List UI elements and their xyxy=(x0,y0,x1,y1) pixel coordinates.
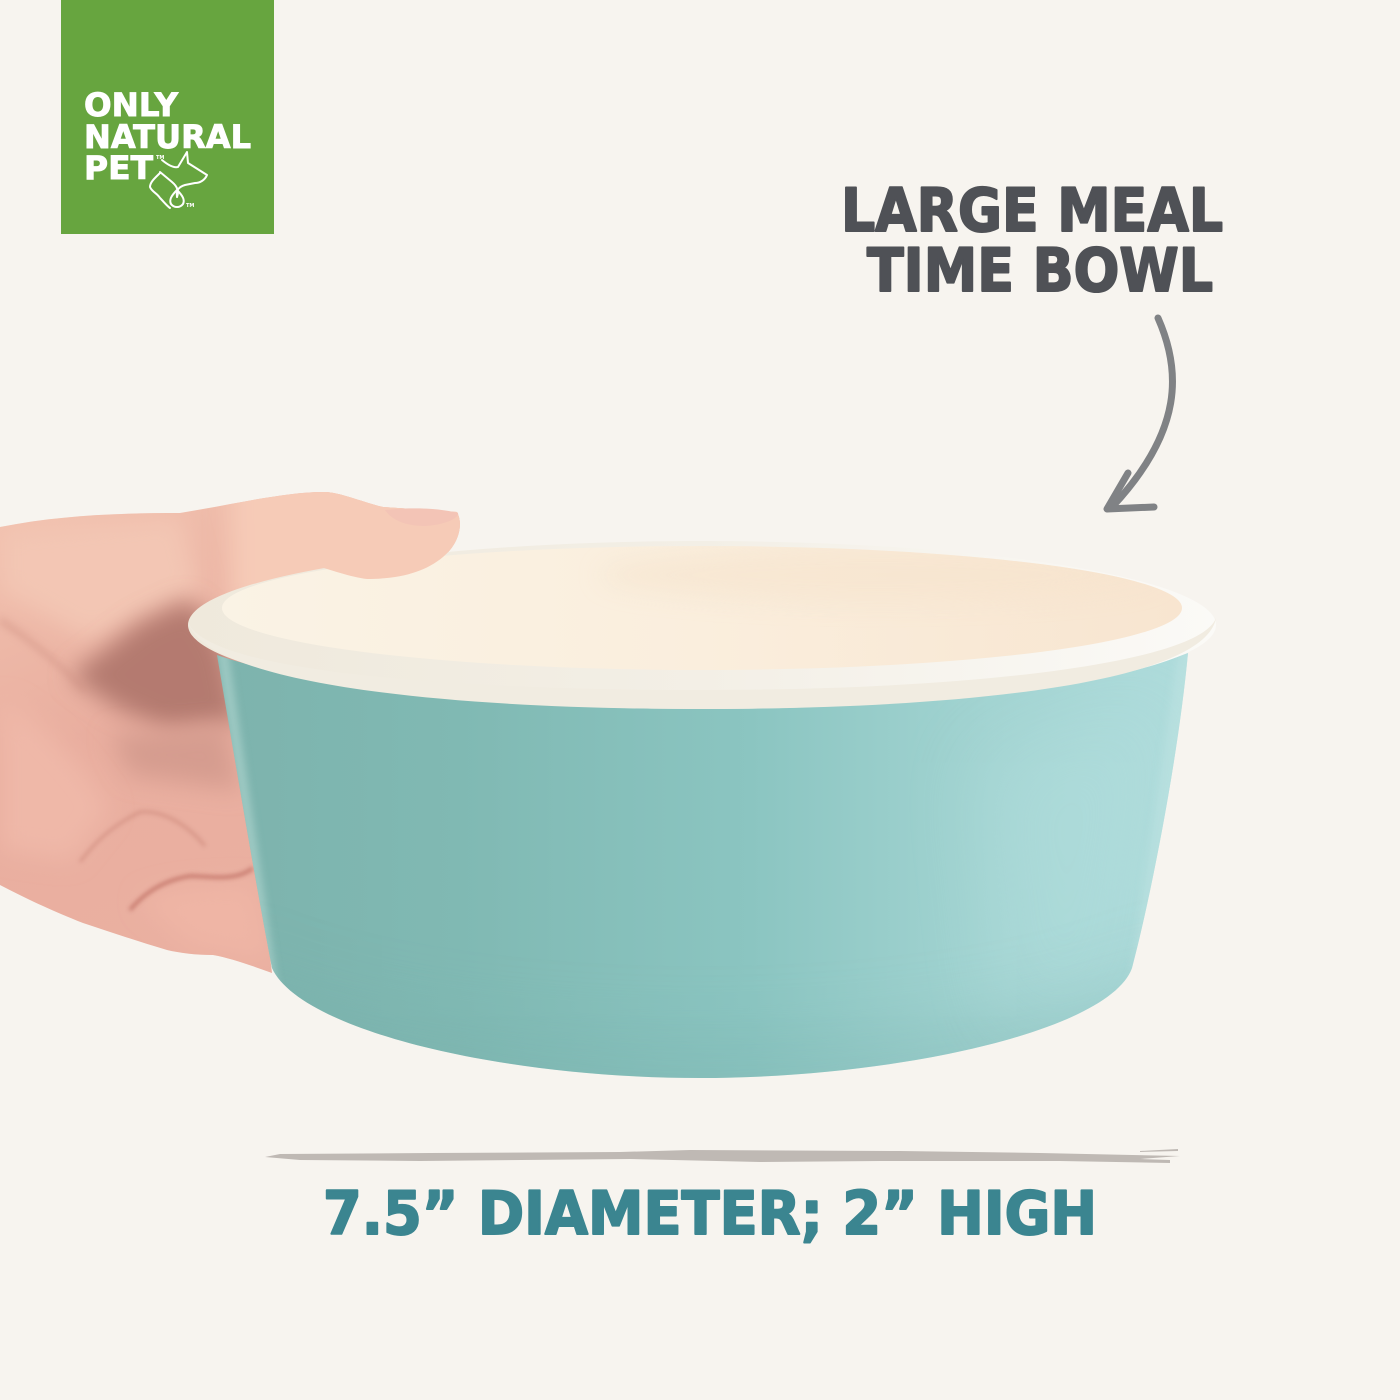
logo: PET xyxy=(84,149,153,187)
thumb over bowl xyxy=(296,492,460,579)
rim xyxy=(188,541,1216,709)
palm highlight xyxy=(13,525,194,636)
bowl body xyxy=(217,653,1188,1078)
logo xyxy=(61,0,274,234)
bowl interior xyxy=(222,546,1182,670)
logo: TM xyxy=(186,203,194,209)
dimensions caption: 7.5” DIAMETER; 2” HIGH xyxy=(323,1179,1097,1249)
hand xyxy=(0,492,460,973)
heading: large meal time bowl xyxy=(841,176,1223,306)
logo: ONLY xyxy=(84,86,179,124)
arrow xyxy=(1107,318,1173,509)
crease palm xyxy=(1,620,66,672)
lower palm shade xyxy=(116,734,237,790)
palm shadow under thumb xyxy=(70,600,240,730)
logo: TM xyxy=(156,155,164,161)
logo: NATURAL xyxy=(84,118,251,156)
heading: large meal time bowl: TIME BOWL xyxy=(867,236,1213,306)
crease lower xyxy=(130,868,253,910)
crease upper xyxy=(80,812,205,862)
mount of palm xyxy=(11,737,92,846)
thumb nail xyxy=(385,508,458,526)
rim lower band xyxy=(188,618,1216,709)
bowl xyxy=(188,541,1216,1120)
lower finger xyxy=(140,885,270,960)
divider brush line xyxy=(265,1149,1180,1163)
heading: large meal time bowl: LARGE MEAL xyxy=(841,176,1223,246)
interior shading xyxy=(651,564,810,586)
thumb base light xyxy=(226,492,324,593)
